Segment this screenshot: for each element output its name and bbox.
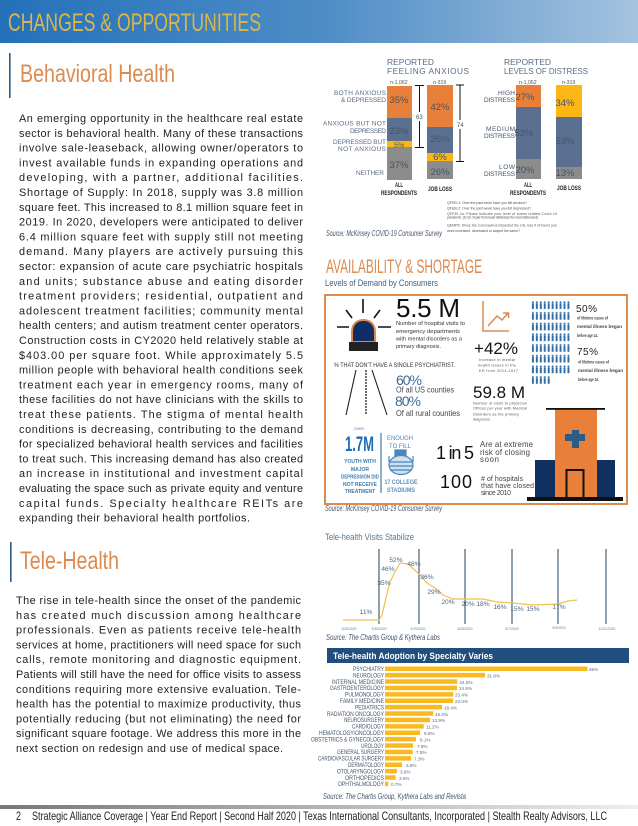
heading: Behavioral Health: Behavioral Health [20, 60, 175, 88]
source: anxiety charts: Source: McKinsey COVID-19 Consumer Survey [326, 229, 443, 238]
stat: 1.7M youth: NOT RECEIVE [343, 482, 378, 488]
icon: stadium [389, 450, 413, 474]
stat: 1 in 5: soon [480, 455, 499, 464]
chart: adoption by specialty: 7.8% [417, 744, 427, 749]
footnotes [447, 201, 557, 233]
text block: behavioral health body: Construction costs in CY2020 held relatively stable at [19, 335, 303, 347]
chart: adoption by specialty: 3.6% [406, 763, 416, 768]
stat: 5.5 M visits: primary diagnosis. [396, 344, 441, 350]
stat: 75% lifetime cases [577, 347, 623, 382]
text block: behavioral health body: million people with behavioral health conditions seek [19, 365, 304, 377]
stat: 1.7M youth: OVER [354, 427, 364, 431]
chart: adoption by specialty: PSYCHIATRY [353, 666, 384, 673]
chart: tele-health visits line: 9/30/020 [552, 626, 566, 630]
chart title: REPORTED [387, 58, 434, 67]
row labels: NOT ANXIOUS [338, 146, 387, 153]
stat: 1 in 5: risk of closing [480, 448, 530, 457]
chart: tele-health visits line: 8/7/2020 [505, 627, 519, 631]
row labels: LOW [499, 164, 516, 171]
heading: tele-health visits: Tele-health Visits Stabilize [325, 532, 414, 542]
stat: 50% lifetime cases [576, 304, 622, 338]
stat: 1 in 5: 1 in 5 [436, 443, 474, 463]
chart: reported feeling anxious: 5% [394, 142, 404, 150]
chart: reported feeling anxious: 74 [457, 123, 464, 129]
text block: tele-health body: calls, remote monitoring and diagnostic equipment. [16, 654, 301, 666]
chart: tele-health visits line: 16% [493, 604, 507, 611]
stat: +42%: +42% [474, 339, 518, 358]
icon: road [346, 370, 387, 415]
chart: reported feeling anxious: 26% [430, 134, 450, 145]
stat: 60 and 80 percent counties: 60% [396, 372, 422, 388]
footnotes: QFEEL2: Over the past week have you felt depressed? [447, 206, 531, 210]
chart: reported feeling anxious: n-319 [433, 80, 446, 86]
stat: +42%: health issues in the [478, 364, 516, 368]
stat: 1.7M youth: 1.7M [345, 433, 374, 456]
chart: tele-health visits line: 3/28/2020 [341, 627, 357, 631]
stat: 1 in 5: Are at extreme [480, 440, 533, 449]
chart: adoption by specialty: GENERAL SURGERY [337, 749, 384, 756]
chart: adoption by specialty: DERMATOLOGY [348, 762, 384, 769]
chart title: REPORTED [504, 58, 551, 67]
stat: 1.7M youth: TREATMENT [345, 489, 375, 495]
stat: 1.7M youth: DEPRESSION DID [341, 474, 379, 480]
chart: adoption by specialty: 7.3% [414, 757, 424, 762]
source: tele-health visits: Source: The Chartis Group & Kythera Labs [326, 633, 440, 642]
text block: behavioral health body: Shortage of Supply: In 2018, supply was 3.8 million [19, 187, 303, 199]
stat: 1.7M youth: MAJOR [351, 467, 369, 473]
stat: 5.5 M visits: emergency departments [396, 329, 460, 335]
stat: 100 hospitals closed: 100 [440, 472, 472, 492]
stat: 60 and 80 percent counties: Of all US counties [396, 384, 454, 394]
chart: tele-health visits line: 11% [360, 609, 372, 616]
chart: adoption by specialty: 15.2% [435, 712, 448, 717]
chart: reported feeling anxious: ALL [395, 182, 403, 189]
chart: adoption by specialty: 3.6% [399, 776, 409, 781]
stat: 59.8 M: 59.8 M [473, 383, 525, 402]
chart header: Tele-health Adoption by Specialty Varies [333, 651, 493, 662]
row labels: DISTRESS [484, 171, 516, 178]
stat: +42%: ER from 2014-2017 [479, 369, 518, 373]
text block: behavioral health body: for specialized behavioral health services and facilities [19, 439, 304, 451]
stat: 59.8 M: Disorders as the primary [473, 412, 519, 416]
chart: reported levels of distress: n-1,062 [519, 80, 537, 86]
chart: adoption by specialty: 23.0% [455, 699, 468, 704]
icon: line chart [483, 301, 509, 331]
stat: 100 hospitals closed: that have closed [481, 483, 534, 490]
heading: Tele-Health: Tele-Health [20, 547, 119, 575]
chart: adoption by specialty: PEDIATRICS [355, 704, 384, 711]
stat: enough to fill stadiums [384, 435, 418, 494]
text block: behavioral health body: square feet. This increased to 8.1 million square feet in [19, 202, 303, 214]
chart: reported levels of distress: ALL [524, 182, 532, 189]
stat: 1.7M youth [341, 427, 379, 495]
stat: 50% lifetime cases: mental illness began [577, 324, 622, 329]
chart: adoption by specialty: INTERNAL MEDICINE [332, 679, 384, 686]
text block: tele-health body: potentially reducing (but not eliminating) the need for [16, 713, 301, 725]
heading: availability and shortage: AVAILABILITY & SHORTAGE [326, 257, 482, 278]
chart: reported feeling anxious: 37% [389, 160, 409, 171]
chart title [387, 58, 470, 76]
chart: tele-health visits line: 35% [377, 580, 391, 587]
stat: 60 and 80 percent counties: 80% [395, 393, 421, 409]
text block: behavioral health body: expanding their behavioral health portfolios. [19, 513, 250, 525]
chart: reported feeling anxious: n-1,062 [390, 80, 408, 86]
text block: behavioral health body: $403.00 per square foot. While approximately 5.5 [19, 350, 303, 362]
text: psychiatrist shortage heading: % THAT DON'T HAVE A SINGLE PSYCHIATRIST. [334, 362, 455, 369]
text block: tele-health body: professionals. Even as patients receive tele-health [16, 625, 301, 637]
stat: 50% lifetime cases: before age 14. [577, 333, 598, 338]
chart: tele-health visits line: 52% [389, 557, 403, 564]
chart title [504, 58, 589, 76]
text block: behavioral health body: sector: expansion of acute care psychiatric hospitals [19, 261, 304, 273]
chart: adoption by specialty: UROLOGY [361, 743, 384, 750]
row labels: BOTH ANXIOUS [334, 90, 387, 97]
chart title: LEVELS OF DISTRESS [504, 67, 589, 76]
stat: enough to fill stadiums: STADIUMS [387, 488, 415, 494]
text block: behavioral health body: capital funds. Specialty healthcare REITs are [19, 498, 303, 510]
text block: behavioral health body: involve sale-leaseback, allowing owner/operators to [19, 143, 303, 155]
footnotes: QEMP6: Since the Coronavirus impacted the US, has # of hours you [447, 224, 557, 228]
text block: behavioral health body: An emerging opportunity in the healthcare real estate [19, 113, 303, 125]
chart: reported feeling anxious: 42% [430, 102, 450, 113]
chart: adoption by specialty: 31.8% [487, 673, 500, 678]
row labels: MEDIUM [486, 126, 515, 133]
stat: 59.8 M [473, 383, 527, 422]
chart: tele-health visits line: 29% [427, 589, 441, 596]
chart header [327, 648, 629, 663]
text block: behavioral health body: invest available funds in expanding operations and [19, 157, 303, 169]
chart: reported levels of distress: 53% [555, 136, 575, 147]
chart: reported levels of distress [484, 58, 589, 197]
stat: +42% [474, 339, 518, 373]
text block: tele-health body: health has the potential to maximize productivity, thus [16, 699, 302, 711]
stat: 50% lifetime cases: of lifetime cases of [577, 316, 608, 320]
chart: tele-health visits line: 18% [476, 601, 490, 608]
stat: 75% lifetime cases: of lifetime cases of [578, 360, 609, 364]
stat: 60 and 80 percent counties: Of all rural counties [396, 408, 460, 418]
header banner [0, 0, 638, 43]
footnotes: QFEEL1: Over the past week have you felt anxious? [447, 201, 527, 205]
stat: 59.8 M: Offices per year with Medical [473, 406, 527, 410]
chart: tele-health visits line: 20% [441, 599, 455, 606]
chart: reported levels of distress: RESPONDENTS [510, 190, 546, 197]
chart: tele-health visits line: 4/19/2020 [410, 627, 426, 631]
stat: enough to fill stadiums: TO FILL [389, 443, 411, 450]
chart: tele-health visits line: 46% [381, 566, 395, 573]
chart: tele-health visits line: 15% [526, 606, 540, 613]
stat: 75% lifetime cases: mental illness began [578, 368, 623, 373]
chart: adoption by specialty: 11.2% [426, 725, 439, 730]
chart: tele-health visits line: 3/30/2020 [371, 627, 387, 631]
chart: tele-health visits line: 11/21/2020 [599, 627, 615, 631]
chart: reported feeling anxious: 35% [389, 95, 409, 106]
stat: 100 hospitals closed: since 2010 [481, 490, 511, 497]
stat: 1.7M youth: YOUTH WITH [344, 459, 376, 465]
row labels: DEPRESSED [350, 128, 386, 135]
chart: reported levels of distress: JOB LOSS [557, 185, 581, 192]
text block: behavioral health body: evaluating the space such as private equity and venture [19, 483, 303, 495]
text block: tele-health body: The rise in tele-health since the onset of the pandemic [16, 595, 302, 607]
panel: availability infographic [325, 293, 627, 504]
chart: reported feeling anxious: 63 [416, 115, 423, 121]
text block: behavioral health body: health centers; and autism treatment center operators. [19, 320, 303, 332]
stat: 100 hospitals closed [440, 472, 534, 497]
chart: adoption by specialty: GASTROENTEROLOGY [330, 685, 384, 692]
row labels [323, 90, 387, 177]
stat: 100 hospitals closed: # of hospitals [481, 476, 524, 483]
chart: adoption by specialty: 18.4% [444, 705, 457, 710]
header banner: CHANGES & OPPORTUNITIES [8, 9, 261, 37]
chart: adoption by specialty: 24.5% [459, 686, 472, 691]
footnotes: pandemic. (10 pt. Scale from least distressed to most distressed) [447, 216, 538, 220]
chart: reported levels of distress: 27% [515, 92, 535, 103]
text block: behavioral health body: developing, with a partner, additional facilities. [19, 172, 303, 184]
subheading: levels of demand: Levels of Demand by Consumers [325, 278, 438, 288]
chart: reported levels of distress: 34% [555, 98, 575, 109]
chart: tele-health visits line: 6/28/2020 [457, 627, 473, 631]
text block: behavioral health body: treatment providers; residential, outpatient and [19, 291, 303, 303]
chart: adoption by specialty: 0.7% [391, 782, 401, 787]
chart: adoption by specialty: CARDIOVASCULAR SURGERY [318, 756, 384, 763]
stat: 59.8 M: diagnosis. [473, 418, 491, 422]
row labels: ANXIOUS BUT NOT [323, 120, 386, 128]
chart: tele-health visits line: 17% [552, 604, 566, 611]
chart: adoption by specialty: 23.4% [455, 693, 468, 698]
chart: adoption by specialty: FAMILY MEDICINE [340, 698, 384, 705]
row labels [484, 90, 516, 178]
source: specialty chart: Source: The Chartis Group, Kythera Labs and Revista [323, 792, 466, 801]
stat: 5.5 M visits: Number of hospital visits to [396, 321, 465, 327]
chart title: FEELING ANXIOUS [387, 67, 470, 76]
row labels: DISTRESS [484, 97, 516, 104]
chart: adoption by specialty: OPHTHALMOLOGY [338, 781, 384, 788]
chart: adoption by specialty: NEUROSURGERY [344, 717, 384, 724]
chart: adoption by specialty: OBSTETRICS & GYNECOLOGY [311, 736, 384, 743]
icon: alarm siren [337, 299, 391, 351]
chart: adoption by specialty: OTOLARYNGOLOGY [337, 768, 384, 775]
stat: 75% lifetime cases: before age 24. [578, 377, 599, 382]
chart: adoption by specialty: 13.9% [432, 718, 445, 723]
chart: adoption by specialty: NEUROLOGY [353, 672, 384, 679]
chart: tele-health visits line [341, 549, 615, 631]
row labels: NEITHER [356, 170, 384, 177]
stat: 5.5 M visits: 5.5 M [396, 293, 460, 323]
chart: reported feeling anxious: 6% [433, 152, 447, 163]
row labels: & DEPRESSED [341, 97, 386, 104]
text block: behavioral health body: treatment each year in emergency rooms, many of [19, 379, 304, 391]
footer rule [0, 805, 638, 809]
icon: hospital [527, 408, 623, 501]
text block: tele-health body: Patients will still have the need for office visits to assess [16, 669, 302, 681]
text block: tele-health body [16, 595, 302, 755]
chart: tele-health visits line: 15% [510, 606, 524, 613]
stat: 75% lifetime cases: 75% [577, 347, 598, 358]
stat: 59.8 M: Number of visits to physician [473, 402, 527, 406]
text block: behavioral health body: sector is behavioral health. Many of these transactions [19, 128, 304, 140]
text block: behavioral health body [19, 113, 304, 525]
chart: tele-health visits line: 48% [407, 561, 421, 568]
text block: behavioral health body: and units; substance abuse and eating disorder [19, 276, 303, 288]
chart: adoption by specialty: 24.6% [460, 680, 473, 685]
stat: 5.5 M visits: with mental disorders as a [395, 336, 463, 342]
row labels: DEPRESSED BUT [333, 139, 386, 146]
stat: 5.5 M visits [395, 293, 465, 350]
chart: adoption by specialty: 3.8% [400, 769, 410, 774]
footer text: 2 [16, 809, 21, 823]
row labels: HIGH [498, 90, 515, 97]
chart: adoption by specialty: HEMATOLOGY/ONCOLOGY [319, 730, 384, 737]
chart: reported feeling anxious: RESPONDENTS [381, 190, 417, 197]
text block: behavioral health body: conditions is decreasing, contributing to the demand [19, 424, 303, 436]
text block: behavioral health body: demand. Many players are actively pursuing this [19, 246, 304, 258]
text block: behavioral health body: an increase in institutional and investment capital [19, 468, 303, 480]
row labels: DISTRESS [484, 133, 516, 140]
source: availability panel: Source: McKinsey COVID-19 Consumer Survey [325, 504, 443, 513]
text block: behavioral health body: treat these patients. The stigma of mental health [19, 409, 303, 421]
icon: people grid [531, 301, 570, 384]
chart: adoption by specialty: 9.8% [424, 731, 434, 736]
footnotes: QFEEL2a: Please indicate your level of stress related Covid-19 [447, 212, 557, 216]
text block: behavioral health body: 2019. In 2020, developers were anticipated to deliver [19, 217, 303, 229]
chart: reported feeling anxious: 23% [389, 126, 409, 137]
text block: behavioral health body: adolescent treatment facilities; community mental [19, 305, 303, 317]
footnotes: work increased, decreased or stayed the same? [447, 229, 520, 233]
stat: +42%: Increase in mental [479, 358, 515, 362]
chart: reported levels of distress: 53% [514, 128, 534, 139]
stat: enough to fill stadiums: ENOUGH [387, 435, 413, 442]
chart: tele-health visits line: 20% [461, 601, 475, 608]
chart: adoption by specialty: 7.5% [416, 750, 426, 755]
chart: reported levels of distress: n-319 [562, 80, 575, 86]
chart: adoption by specialty: 65% [589, 667, 598, 672]
chart: reported feeling anxious: 26% [430, 167, 450, 178]
chart: adoption by specialty: ORTHOPEDICS [345, 775, 384, 782]
chart: tele-health visits line: 36% [420, 574, 434, 581]
chart: adoption by specialty: CARDIOLOGY [352, 724, 384, 731]
chart: reported feeling anxious: JOB LOSS [428, 186, 452, 193]
text block: behavioral health body: these facilities do not have clinicians with the skills to [19, 394, 303, 406]
text block: tele-health body: services at home, practitioners will need space for such [16, 639, 301, 651]
heading: Tele-Health [10, 542, 119, 582]
stat: 1 in 5 [436, 440, 533, 464]
stat: 60 and 80 percent counties [395, 372, 460, 418]
text block: tele-health body: has created much discussion among healthcare [16, 610, 301, 622]
chart: reported feeling anxious [323, 58, 470, 197]
chart: reported levels of distress: 20% [515, 165, 535, 176]
text block: tele-health body: next section on redesign and use of medical space. [16, 743, 283, 755]
chart: adoption by specialty: 8.1% [420, 737, 430, 742]
stat: enough to fill stadiums: 17 COLLEGE [384, 480, 418, 486]
chart: adoption by specialty: RADIATION ONCOLOGY [327, 711, 384, 718]
chart: adoption by specialty: PULMONOLOGY [345, 692, 384, 699]
chart: reported levels of distress: 13% [555, 168, 575, 179]
text block: behavioral health body: 6.4 million square feet with supply still not meeting [19, 231, 303, 243]
text block: tele-health body: significant square footage. We address this more in the [16, 728, 301, 740]
chart: adoption by specialty [311, 648, 629, 788]
text block: tele-health body: conditions requiring more extensive evaluation. Tele- [16, 684, 301, 696]
text block: behavioral health body: to treat such. This increasing demand has also created [19, 453, 303, 465]
stat: 50% lifetime cases: 50% [576, 304, 597, 315]
